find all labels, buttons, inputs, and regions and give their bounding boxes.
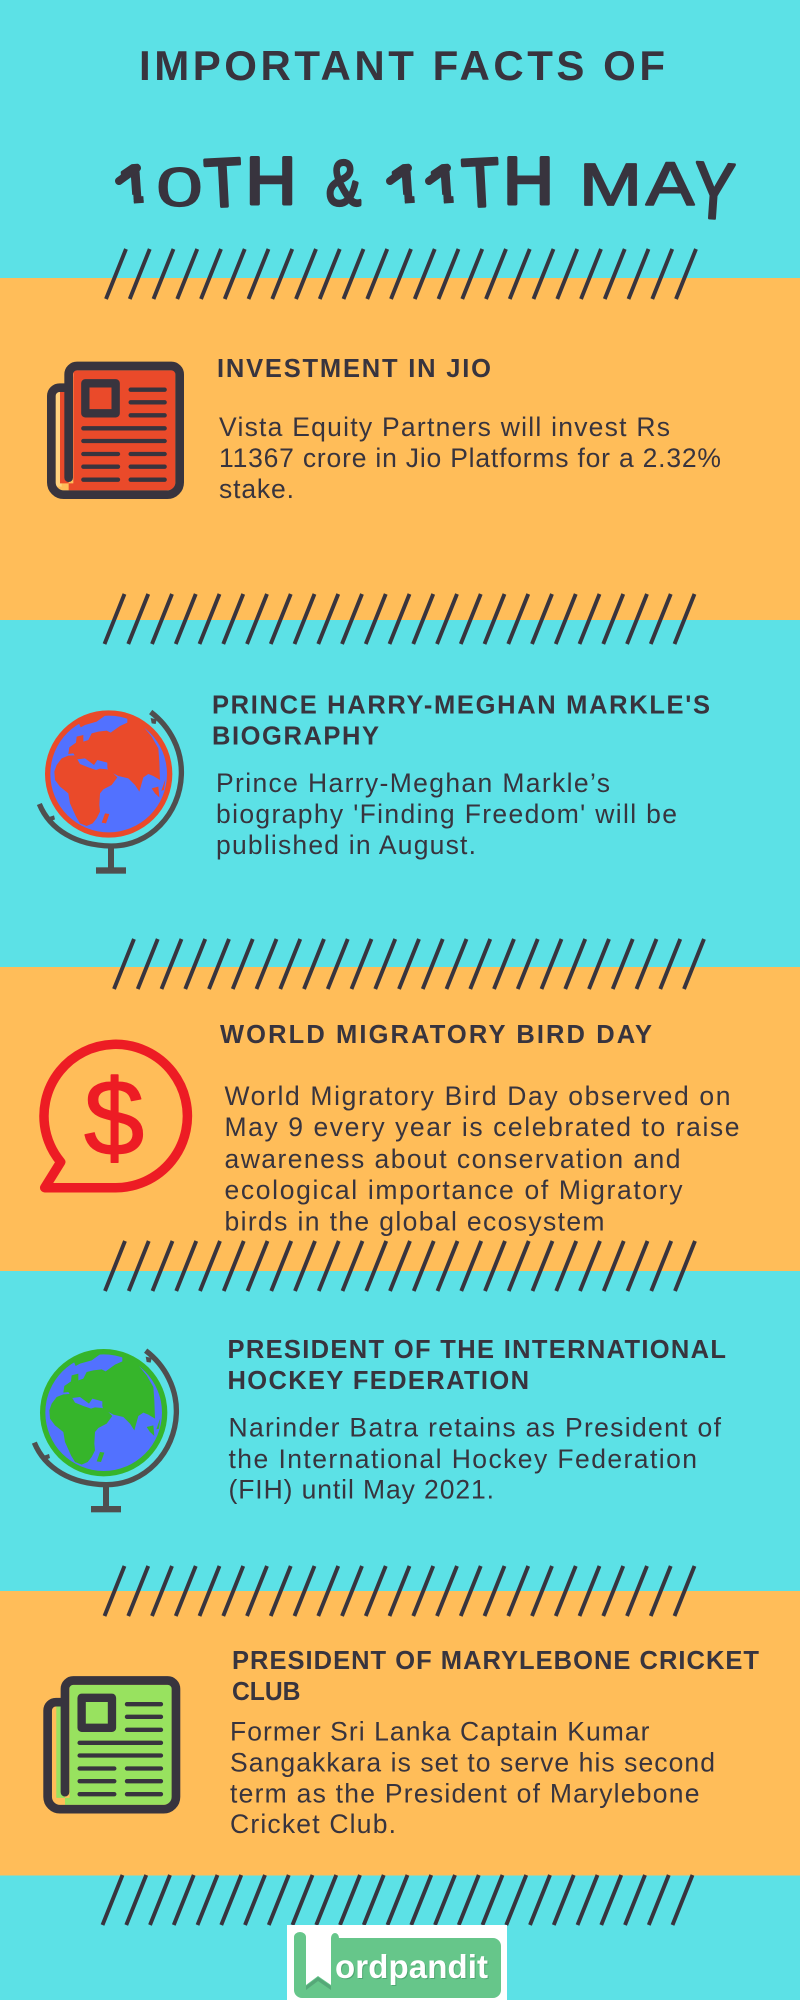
body text: (FIH) until May 2021. (228, 1474, 494, 1504)
icon: dollar speech bubble (44, 1044, 187, 1188)
body text: World Migratory Bird Day observed on (224, 1081, 730, 1111)
body text: the International Hockey Federation (228, 1444, 697, 1474)
title: date in hand lettering: H (246, 144, 296, 219)
body text: term as the President of Marylebone (230, 1778, 700, 1808)
icon: red globe (39, 710, 181, 874)
logo: wordpandit (287, 1925, 507, 2000)
body text: May 9 every year is celebrated to raise (224, 1112, 740, 1142)
body text (216, 768, 677, 860)
body text (228, 1412, 722, 1504)
body text: 11367 crore in Jio Platforms for a 2.32% (219, 443, 721, 473)
title: date in hand lettering: T (460, 144, 501, 222)
body text: Narinder Batra retains as President of (228, 1412, 722, 1442)
heading (212, 692, 710, 750)
icon: green newspaper (48, 1680, 176, 1809)
icon: red newspaper (51, 366, 180, 495)
body text: Vista Equity Partners will invest Rs (219, 412, 670, 442)
heading: WORLD MIGRATORY BIRD DAY (220, 1021, 652, 1049)
title: date in hand lettering: A (646, 150, 695, 219)
panel: biography (0, 620, 800, 967)
heading (228, 1336, 726, 1395)
heading: INVESTMENT IN JIO (217, 355, 491, 383)
heading (232, 1647, 759, 1706)
title: important facts of: IMPORTANT FACTS OF (139, 42, 665, 89)
heading: PRESIDENT OF MARYLEBONE CRICKET (232, 1647, 759, 1675)
body text: ecological importance of Migratory (224, 1175, 683, 1205)
heading: HOCKEY FEDERATION (228, 1367, 529, 1395)
icon: green globe (34, 1349, 176, 1512)
title: date in hand lettering: H (503, 144, 554, 219)
body text: Cricket Club. (230, 1809, 396, 1839)
body text: published in August. (216, 830, 476, 860)
body text (224, 1081, 740, 1236)
body text: birds in the global ecosystem (224, 1206, 604, 1236)
icon: dollar speech bubble: $ (84, 1057, 144, 1178)
title: date in hand lettering: M (579, 151, 642, 218)
title: date in hand lettering: T (203, 144, 244, 222)
panel: international hockey federation (0, 1271, 800, 1591)
title: date in hand lettering: 1 (115, 154, 155, 215)
heading: PRINCE HARRY-MEGHAN MARKLE'S (212, 692, 710, 720)
heading: CLUB (232, 1678, 300, 1706)
panel: world migratory bird day (0, 967, 800, 1271)
logo wordmark: ordpandit (335, 1948, 488, 1985)
body text: Sangakkara is set to serve his second (230, 1748, 715, 1778)
panel: investment in jio (0, 278, 800, 620)
body text: awareness about conservation and (224, 1144, 680, 1174)
body text: biography 'Finding Freedom' will be (216, 799, 677, 829)
title: date in hand lettering: 0 (156, 157, 203, 218)
title: date in hand lettering: Y (690, 146, 737, 237)
panel: marylebone cricket club (0, 1591, 800, 1876)
body text: Prince Harry-Meghan Markle’s (216, 768, 610, 798)
title: date in hand lettering: 1 (386, 154, 426, 215)
title: date in hand lettering: & (326, 148, 361, 219)
title: date in hand lettering (115, 156, 736, 220)
body text (230, 1716, 715, 1839)
body text (219, 412, 721, 504)
heading: PRESIDENT OF THE INTERNATIONAL (228, 1336, 726, 1364)
title: date in hand lettering: 1 (425, 154, 465, 215)
body text: Former Sri Lanka Captain Kumar (230, 1716, 650, 1746)
body text: stake. (219, 474, 294, 504)
header panel (115, 51, 736, 220)
heading: BIOGRAPHY (212, 722, 379, 750)
